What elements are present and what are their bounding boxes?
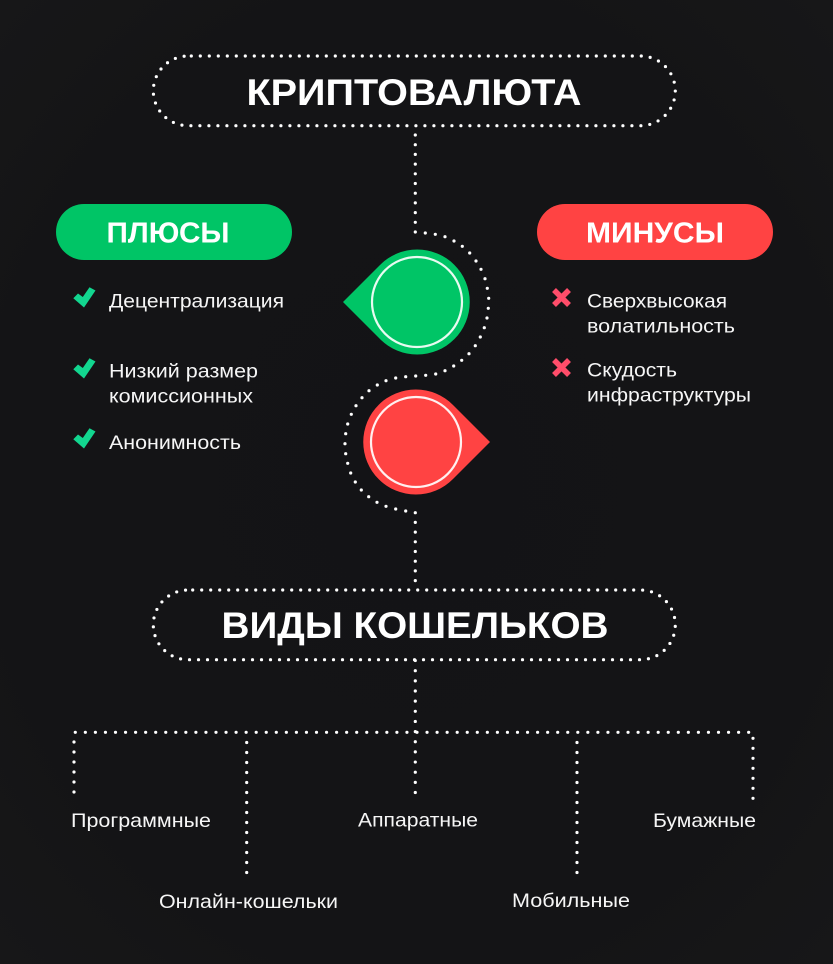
text: low fees xyxy=(109,360,258,408)
text: high volatility: Сверхвысокая xyxy=(587,290,727,312)
text: decentralization: Децентрализация xyxy=(109,290,284,312)
list: cons xyxy=(554,290,751,406)
connector: title to wallet types winding line xyxy=(345,130,489,585)
icon: cross xyxy=(554,290,569,305)
label: hardware: Аппаратные xyxy=(358,810,478,832)
wallet tree connectors xyxy=(74,660,753,874)
text: poor infrastructure: инфраструктуры xyxy=(587,384,751,406)
badge: cons xyxy=(537,204,773,260)
title pill: cryptocurrency xyxy=(153,56,675,126)
badge: pros xyxy=(56,204,292,260)
icon: cross xyxy=(554,360,569,375)
text: low fees: Низкий размер xyxy=(109,360,258,382)
badge: cons: МИНУСЫ xyxy=(586,218,724,250)
icon: check xyxy=(73,428,96,448)
text: low fees: комиссионных xyxy=(109,386,253,408)
icon: check xyxy=(73,358,96,378)
badge: pros: ПЛЮСЫ xyxy=(106,218,230,250)
label: online wallets: Онлайн-кошельки xyxy=(159,891,338,913)
icon: check xyxy=(73,287,96,308)
text: poor infrastructure: Скудость xyxy=(587,360,677,382)
label: paper: Бумажные xyxy=(653,810,756,832)
list: pros xyxy=(73,287,284,454)
green map pin xyxy=(343,250,470,354)
heading pill: wallet types: ВИДЫ КОШЕЛЬКОВ xyxy=(222,605,608,646)
heading pill: wallet types xyxy=(153,590,675,660)
text: poor infrastructure xyxy=(587,360,751,406)
title pill: cryptocurrency: КРИПТОВАЛЮТА xyxy=(246,72,582,113)
label: software: Программные xyxy=(71,810,211,832)
text: high volatility xyxy=(587,290,735,338)
text: anonymity: Анонимность xyxy=(109,432,241,454)
text: high volatility: волатильность xyxy=(587,316,735,338)
label: mobile: Мобильные xyxy=(512,890,630,912)
red map pin xyxy=(363,390,490,494)
